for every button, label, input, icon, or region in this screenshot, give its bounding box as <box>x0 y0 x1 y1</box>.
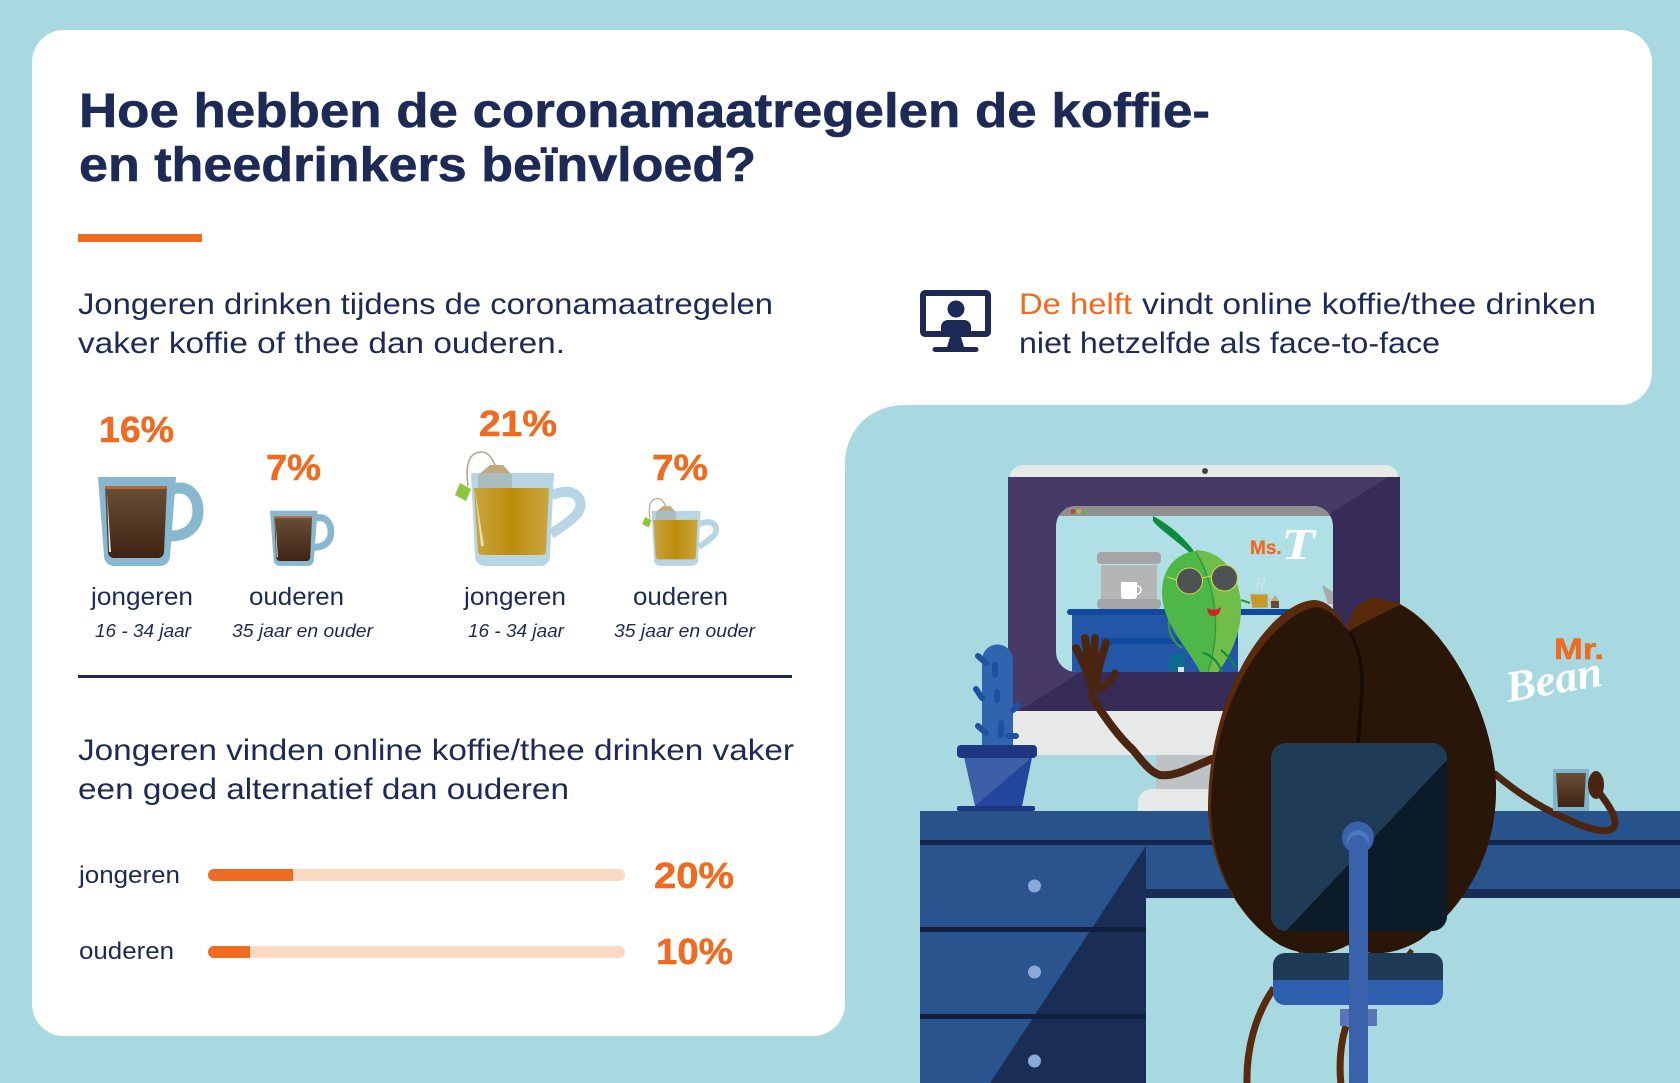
label: ouderen thee: ouderen <box>633 583 728 611</box>
label: Mr. Bean: Mr. <box>1554 633 1604 666</box>
desk <box>920 811 1680 1083</box>
title accent bar <box>78 234 202 242</box>
chair back <box>1271 743 1447 931</box>
bar chart: online alternatief <box>78 855 734 972</box>
label: Ms. T <box>1250 520 1318 569</box>
chair legs and bean legs <box>1247 950 1412 1083</box>
monitor <box>1008 465 1400 811</box>
stat: thee jongeren 21%: 21% <box>479 403 557 444</box>
heading: de helft: vindt online koffie/thee drinken <box>1142 288 1596 321</box>
label: jongeren thee <box>463 583 566 641</box>
bar row: ouderen 10%: ouderen <box>79 938 174 965</box>
icon: small tea cup <box>642 499 716 566</box>
heading: online alternatief <box>78 734 794 806</box>
label: ouderen thee <box>614 583 756 641</box>
label: Ms. T: T <box>1281 520 1318 569</box>
heading: jongeren drinken vaker: Jongeren drinken tijdens de coronamaatregelen <box>78 288 773 321</box>
title <box>79 85 1210 192</box>
heading: online alternatief: Jongeren vinden online koffie/thee drinken vaker <box>78 734 794 767</box>
chair seat <box>1273 953 1443 1026</box>
label: ouderen koffie: 35 jaar en ouder <box>232 621 374 641</box>
Mr. Bean right arm and coffee cup <box>1495 769 1615 831</box>
heading: online alternatief: een goed alternatief dan ouderen <box>78 773 569 806</box>
Mr. Bean body <box>1208 598 1496 954</box>
stat: thee ouderen 7%: 7% <box>652 447 708 488</box>
label: Ms. T: Ms. <box>1250 538 1282 559</box>
icon: large coffee cup <box>98 477 198 566</box>
bar row: jongeren 20% <box>78 855 734 896</box>
title: en theedrinkers beïnvloed? <box>79 139 756 192</box>
heading: jongeren drinken vaker: vaker koffie of thee dan ouderen. <box>78 327 565 360</box>
icon: video call monitor <box>920 290 991 352</box>
bar row: jongeren 20%: 20% <box>654 855 734 896</box>
label: ouderen thee: 35 jaar en ouder <box>614 621 756 641</box>
label: ouderen koffie: ouderen <box>249 583 344 611</box>
heading: de helft: De helft <box>1019 288 1133 321</box>
chair pole <box>1342 822 1374 1083</box>
label: jongeren thee: jongeren <box>463 583 566 611</box>
label: ouderen koffie <box>232 583 374 641</box>
heading: de helft <box>1019 288 1596 360</box>
heading: jongeren drinken vaker <box>78 288 773 360</box>
icon: large tea cup <box>455 452 581 566</box>
stat: koffie ouderen 7%: 7% <box>266 447 321 488</box>
cactus in pot <box>957 644 1037 811</box>
title: Hoe hebben de coronamaatregelen de koffie- <box>79 85 1210 138</box>
label: jongeren thee: 16 - 34 jaar <box>468 621 565 641</box>
bar row: ouderen 10%: 10% <box>656 931 733 972</box>
Mr. Bean left arm and waving hand <box>1076 638 1212 775</box>
label: Mr. Bean: Bean <box>1501 647 1606 712</box>
stat: koffie jongeren 16%: 16% <box>99 409 174 450</box>
illustration: video call at the desk <box>920 465 1680 1083</box>
icon: small coffee cup <box>270 511 331 566</box>
bar row: ouderen 10% <box>79 931 733 972</box>
monitor screen: Ms. T <box>1056 506 1333 672</box>
label: jongeren koffie: 16 - 34 jaar <box>95 621 192 641</box>
bar row: jongeren 20%: jongeren <box>78 862 180 889</box>
label: jongeren koffie: jongeren <box>90 583 193 611</box>
heading: de helft: niet hetzelfde als face-to-face <box>1019 327 1440 360</box>
label: jongeren koffie <box>90 583 193 641</box>
